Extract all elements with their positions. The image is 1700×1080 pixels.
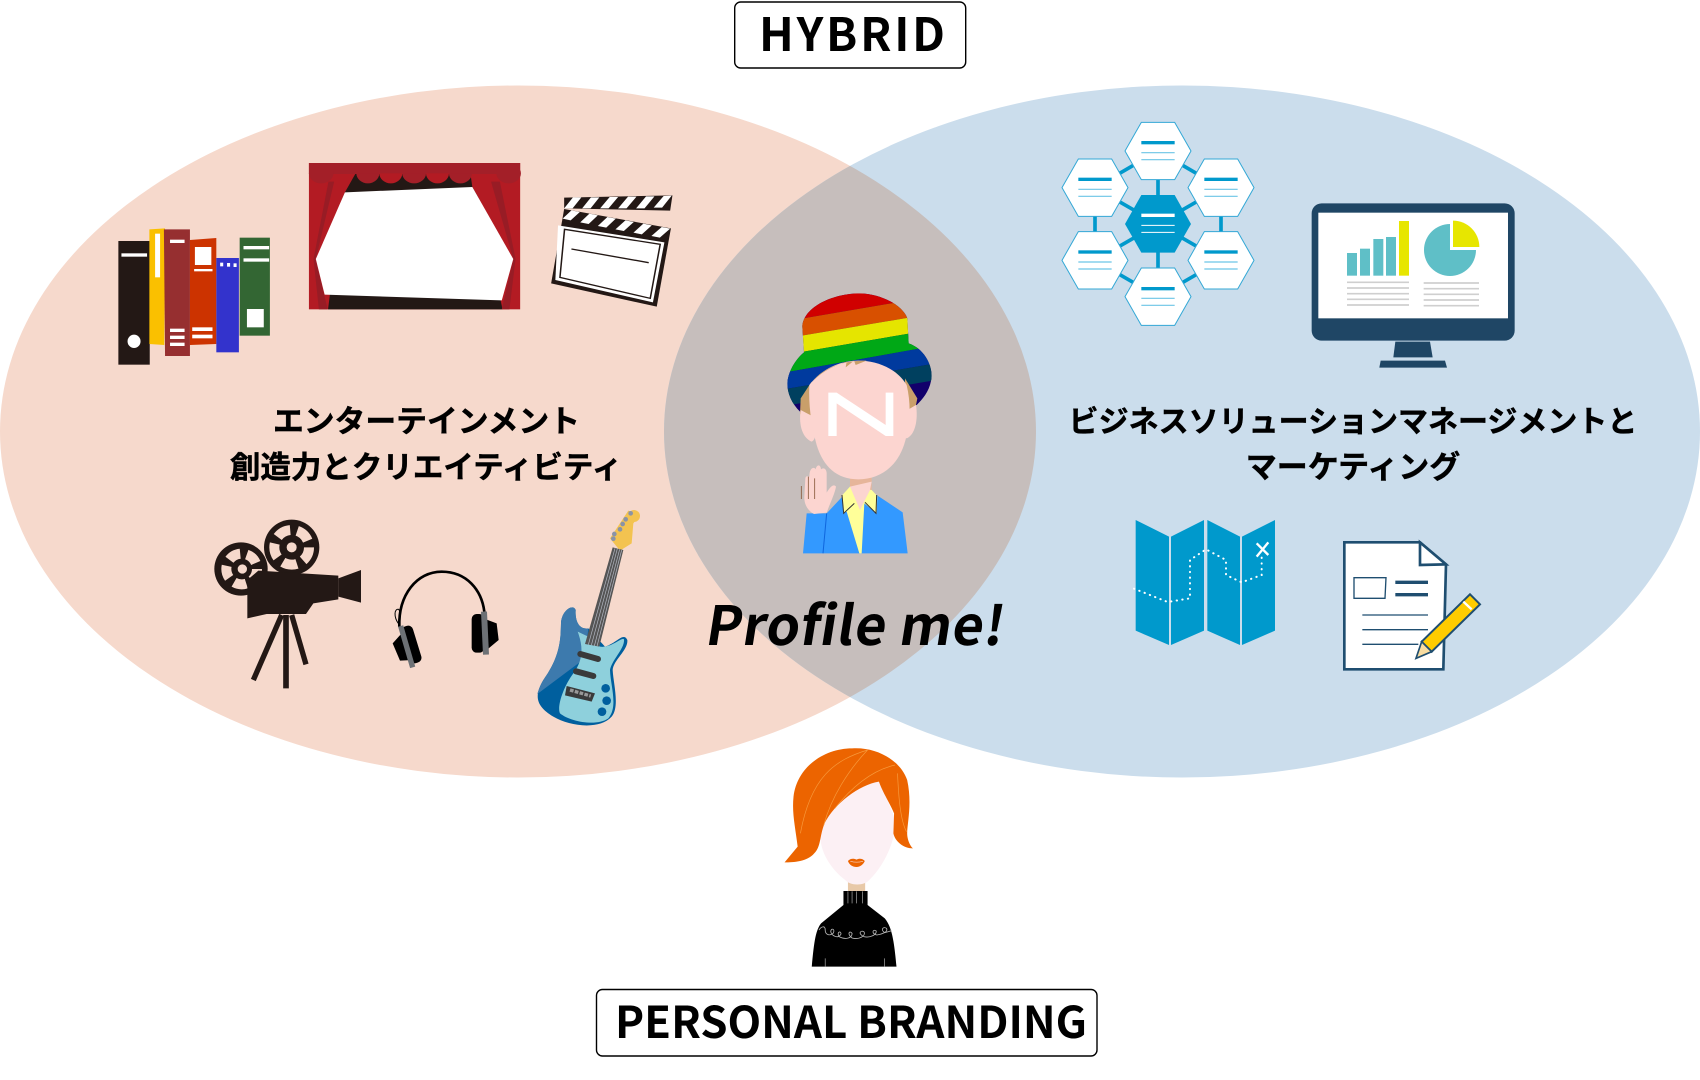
hand bbox=[804, 465, 836, 514]
icon: electric guitar bbox=[537, 510, 640, 725]
venn diagram: right circle business bbox=[664, 86, 1700, 778]
icon: document with pencil bbox=[1344, 542, 1480, 669]
ears bbox=[800, 410, 816, 442]
icon: folded map bbox=[1134, 520, 1275, 645]
icon: hexagon network bbox=[1062, 122, 1254, 325]
ear bbox=[894, 812, 903, 838]
text: business label: ビジネスソリューションマネージメントと bbox=[1069, 406, 1637, 439]
face bbox=[820, 780, 895, 884]
icon: woman with orange hair bbox=[785, 748, 913, 967]
text: entertainment label bbox=[230, 404, 622, 485]
hair bbox=[785, 748, 913, 862]
face bbox=[809, 361, 910, 479]
hair sides bbox=[800, 382, 815, 423]
icon: headphones bbox=[393, 572, 499, 667]
text: business label bbox=[1069, 406, 1637, 485]
icon: theatre stage bbox=[309, 163, 521, 309]
neck bbox=[848, 882, 865, 892]
icon: man with rainbow hat bbox=[787, 293, 932, 554]
N logo bbox=[828, 393, 893, 436]
neck bbox=[850, 477, 872, 500]
text: entertainment label: エンターテインメント bbox=[273, 404, 580, 439]
venn diagram: left circle entertainment bbox=[0, 86, 1036, 778]
icon: clapperboard bbox=[551, 195, 672, 307]
lips bbox=[848, 859, 865, 867]
icon: movie camera bbox=[214, 520, 361, 688]
text: entertainment label: 創造力とクリエイティビティ bbox=[230, 451, 622, 485]
text: Profile me!: Profile me! bbox=[701, 582, 1012, 661]
venn diagram: overlap bbox=[664, 166, 1036, 697]
icon: monitor with charts bbox=[1312, 203, 1515, 368]
heading: HYBRID: HYBRID bbox=[759, 0, 945, 65]
heading: PERSONAL BRANDING: PERSONAL BRANDING bbox=[615, 987, 1087, 1051]
hat bbox=[787, 293, 932, 412]
text: business label: マーケティング bbox=[1246, 450, 1460, 485]
sweater bbox=[812, 891, 896, 967]
icon: books bbox=[118, 228, 270, 365]
shirt bbox=[842, 487, 877, 553]
jacket bbox=[803, 495, 908, 553]
